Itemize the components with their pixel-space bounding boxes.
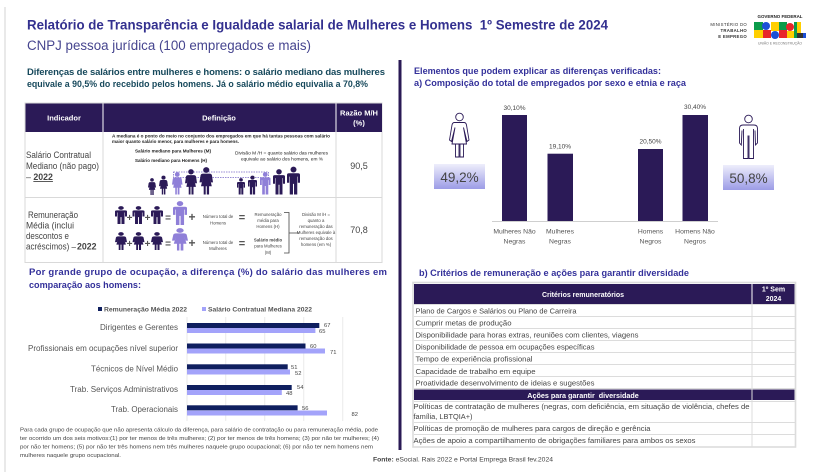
ministry name: TRABALHO (720, 28, 747, 33)
average people equation: + (145, 213, 151, 224)
definition text: median: Salário mediano para Homens (H) (135, 158, 207, 163)
definition text: median: maior quanto salário menor, para mulheres e para homens. (112, 139, 239, 144)
category labels: Trab. Serviços Administrativos (70, 385, 178, 394)
category labels (28, 323, 179, 414)
value labels: 67 (324, 323, 330, 329)
columns (502, 115, 708, 221)
category labels: Dirigentes e Gerentes (100, 323, 178, 332)
footnote: ter ocorrido um dos seis motivos:(1) por ter menos de três mulheres; (2) por ter menos de três homens; (3) por não ter mulheres; (4) (20, 436, 379, 442)
definition text: median: equivale ao salário dos homens, em % (241, 156, 323, 162)
value labels: 48 (286, 391, 292, 397)
average people equation: = (165, 239, 171, 250)
legend: Salário Contratual Mediana 2022 (208, 306, 313, 314)
icon: woman outline (450, 113, 469, 157)
legend (98, 306, 313, 314)
criteria header (414, 284, 794, 304)
average people equation: + (127, 213, 133, 224)
criteria rows: Disponibilidade para horas extras, reuniões com clientes, viagens (416, 332, 639, 340)
equation labels: quanto a (308, 218, 325, 223)
row label: remuneracao media: 2022 (77, 242, 97, 252)
definition text: median (112, 134, 330, 163)
value labels: 65 (319, 329, 325, 335)
ministry name: MINISTÉRIO DO (710, 22, 747, 27)
table header: Indicador (47, 114, 81, 122)
criteria rows (416, 308, 639, 388)
ministry name: E EMPREGO (718, 34, 747, 39)
footnote (20, 428, 379, 459)
row label: remuneracao media: Remuneração (28, 210, 78, 220)
brasil colour mark (754, 22, 806, 39)
panel: criteria table (413, 282, 796, 447)
kpi: women share: 49,2% (440, 170, 479, 185)
action rows: Políticas de contratação de mulheres (negras, com deficiência, em situação de violência, chefes de (414, 404, 750, 411)
value labels: 52 (295, 371, 301, 377)
value labels: 54 (297, 385, 304, 391)
equation labels: Mulheres (209, 246, 227, 251)
category labels: Mulheres Não (493, 228, 536, 236)
heading: criteria: b) Critérios de remuneração e ações para garantir diversidade (419, 268, 689, 279)
heading: occupation groups (29, 267, 387, 291)
category labels: Profissionais em ocupações nível superior (28, 344, 178, 353)
equation labels: Número total de (203, 214, 234, 219)
row label: remuneracao media: descontos e (26, 231, 69, 241)
kpi: women share (434, 164, 485, 189)
row label: remuneracao media: Média (inclui (26, 220, 74, 230)
legend: Remuneração Média 2022 (104, 306, 188, 314)
equation labels: Salário médio (254, 238, 282, 242)
average people equation: = (165, 213, 171, 224)
value 90,5: 90,5 (350, 161, 368, 171)
equation labels: Número total de (203, 240, 234, 245)
government logo block (710, 14, 806, 46)
table header: Definição (202, 114, 236, 122)
bar chart: occupations (28, 306, 358, 421)
category labels: Homens (638, 228, 664, 236)
ministry name (710, 22, 747, 39)
value labels: 30,10% (503, 105, 526, 112)
bars: remuneracao media (187, 323, 319, 410)
average people equation (115, 201, 245, 250)
kpi: men share: 50,8% (729, 171, 768, 186)
definition text: median: A mediana é o ponto do meio no conjunto dos empregados em que há tantas pessoas com salário (112, 134, 330, 138)
heading: elements that explain: a) Composição do total de empregados por sexo e etnia e raça (414, 78, 687, 89)
table header: Razão M/H (340, 108, 378, 118)
criteria rows: Capacidade de trabalho em equipe (416, 369, 536, 376)
row label: salario contratual: – 2022 (26, 172, 53, 182)
average people equation: + (145, 239, 151, 250)
heading: salary differences: equivale a 90,5% do recebido pelos homens. Já o salário médio equivalia a 70,8% (27, 79, 369, 90)
category labels: Trab. Operacionais (111, 405, 178, 414)
value labels: 20,50% (639, 138, 662, 146)
actions header (414, 390, 794, 400)
subtitle: CNPJ pessoa jurídica (100 empregados e mais) (27, 38, 311, 53)
average people equation: + (188, 236, 196, 250)
category labels: Homens Não (675, 228, 715, 236)
bracket (284, 212, 299, 253)
heading: elements that explain (414, 66, 687, 89)
criteria rows: Disponibilidade de pessoa em ocupações específicas (416, 344, 595, 352)
criteria rows: Proatividade desenvolvimento de ideias e sugestões (416, 380, 595, 388)
value labels (503, 104, 706, 150)
bars: salario contratual (187, 328, 327, 416)
average people equation: = (239, 212, 245, 224)
page edge strip (4, 7, 6, 472)
category labels: Negras (504, 238, 526, 246)
average people equation: + (127, 239, 133, 250)
criteria rows: Cumprir metas de produção (416, 320, 512, 328)
equation labels: Mulheres equivale à (297, 230, 336, 235)
uniao e reconstrucao label: UNIÃO E RECONSTRUÇÃO (758, 40, 802, 46)
heading: occupation groups: comparação aos homens: (29, 280, 141, 291)
criteria rows: Plano de Cargos e Salários ou Plano de Carreira (416, 308, 577, 316)
kpi: men share (723, 165, 774, 190)
average people equation: = (239, 238, 245, 250)
value labels: 82 (352, 412, 358, 418)
row label: remuneracao media (26, 210, 97, 252)
equation labels: remuneração dos (299, 236, 333, 241)
heading: elements that explain: Elementos que podem explicar as diferenças verificadas: (414, 66, 661, 77)
table header (26, 104, 382, 132)
equation labels: para Mulheres (254, 244, 282, 248)
definition text: median: Salário mediano para Mulheres (M) (135, 148, 211, 154)
value labels: 56 (302, 406, 308, 412)
action rows: Políticas de promoção de mulheres para cargos de direção e gerência (414, 426, 651, 433)
footnote: por não ter homens; (5) por não ter três homens nem três mulheres naquele grupo ocupacional; (6) por não ter nem homens nem (20, 444, 373, 450)
icon: man outline (740, 115, 758, 158)
criteria header: Critérios remuneratórios (542, 292, 624, 299)
category labels: Negras (549, 238, 572, 246)
equation labels: Homens (H) (256, 224, 280, 229)
criteria header: 2024 (766, 296, 781, 303)
table header: (%) (353, 118, 365, 128)
equation labels: (M) (265, 250, 272, 255)
action rows (414, 404, 750, 445)
heading: salary differences (27, 67, 385, 90)
category labels: Negros (640, 238, 662, 246)
median people illustration (148, 167, 300, 195)
action rows: Ações de apoio a compartilhamento de obrigações familiares para ambos os sexos (414, 438, 696, 445)
category labels (493, 228, 715, 246)
average people equation: + (188, 210, 196, 224)
equation labels: homens (em %) (301, 242, 332, 247)
value labels: 51 (291, 365, 297, 371)
source note: Fonte: eSocial. Rais 2022 e Portal Emprega Brasil fev.2024 (373, 456, 553, 464)
footnote: Para cada grupo de ocupação que não apresenta cálculo da diferença, para salário de contratação ou para remuneração média, pode (20, 428, 378, 434)
heading: occupation groups: Por grande grupo de ocupação, a diferença (%) do salário das mulheres em (29, 267, 387, 278)
definition text: median: Divisão M /H = quanto salário das mulheres (235, 150, 329, 156)
row label: salario contratual: Salário Contratual (26, 150, 91, 160)
criteria header: 1º Sem (762, 286, 785, 294)
title: Relatório de Transparência e Igualdade salarial de Mulheres e Homens 1º Semestre de 2024 (27, 16, 608, 32)
category labels: Negros (684, 238, 707, 246)
category labels: Mulheres (546, 228, 575, 236)
row label: salario contratual (26, 150, 99, 182)
equation labels (203, 212, 336, 255)
equation labels: Remuneração (254, 212, 282, 217)
column chart: workforce composition (492, 104, 718, 246)
category labels: Técnicos de Nível Médio (91, 364, 179, 374)
equation labels: Divisão M /H = (302, 212, 331, 217)
panel: indicator table (25, 103, 382, 262)
heading: salary differences: Diferenças de salários entre mulheres e homens: o salário mediano das mulheres (27, 67, 385, 78)
equation labels: Homens (210, 220, 226, 226)
row label: salario contratual: Mediano (não pago) (26, 161, 99, 171)
criteria rows: Tempo de experiência profissional (416, 356, 533, 364)
value labels: 30,40% (684, 104, 706, 111)
value labels: 60 (310, 344, 316, 350)
value labels: 19,10% (549, 144, 571, 150)
equation labels: remuneração das (299, 224, 333, 229)
actions header: Ações para garantir diversidade (527, 391, 639, 400)
governo federal label: GOVERNO FEDERAL (758, 14, 803, 19)
equation labels: média para (257, 218, 279, 223)
action rows: família, LBTQIA+) (414, 414, 472, 421)
row label: remuneracao media: acréscimos) – (26, 242, 76, 252)
value labels: 71 (330, 350, 336, 356)
footnote: mulheres naquele grupo ocupacional. (20, 453, 121, 459)
vertical divider (398, 60, 402, 450)
value 70,8: 70,8 (350, 225, 368, 235)
value labels (286, 323, 358, 418)
